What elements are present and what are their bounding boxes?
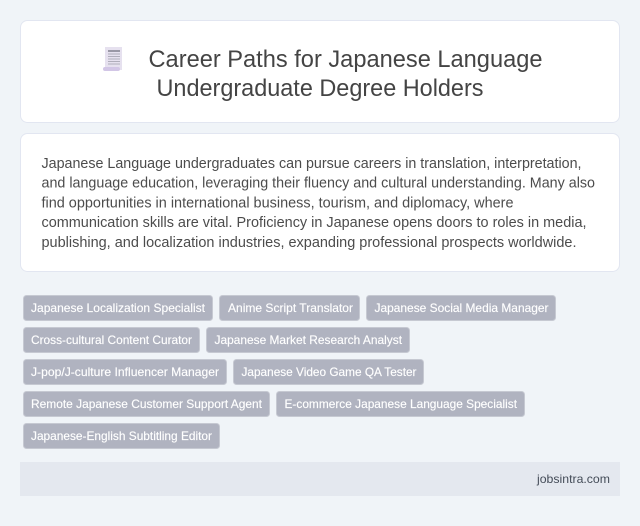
tag: E-commerce Japanese Language Specialist: E-commerce Japanese Language Specialist xyxy=(284,397,518,411)
tag list xyxy=(24,296,556,448)
title: Career Paths for Japanese Language xyxy=(148,46,542,73)
tag: Japanese Localization Specialist: Japanese Localization Specialist xyxy=(31,301,206,315)
tag: Cross-cultural Content Curator xyxy=(24,328,200,352)
text block: summary xyxy=(42,156,595,251)
tag: Japanese Social Media Manager xyxy=(366,296,556,320)
text block: summary: Japanese Language undergraduates can pursue careers in translation, interpretation, xyxy=(42,156,582,172)
title: Undergraduate Degree Holders xyxy=(156,75,484,102)
tag: Japanese-English Subtitling Editor: Japanese-English Subtitling Editor xyxy=(31,429,212,443)
panel: summary xyxy=(20,134,620,272)
tag: Remote Japanese Customer Support Agent xyxy=(24,392,270,416)
tag: J-pop/J-culture Influencer Manager: J-pop/J-culture Influencer Manager xyxy=(31,365,219,379)
footer: jobsintra.com xyxy=(536,472,610,486)
title xyxy=(148,46,542,102)
text block: summary: publishing, and localization industries, expanding professional prospects worldwide. xyxy=(42,235,576,251)
footer xyxy=(20,462,620,496)
tag: Anime Script Translator xyxy=(220,296,360,320)
panel: header xyxy=(20,20,620,122)
tag: Japanese Video Game QA Tester xyxy=(234,360,424,384)
tag: Japanese Localization Specialist xyxy=(24,296,212,320)
tag: Japanese Market Research Analyst: Japanese Market Research Analyst xyxy=(214,333,403,347)
tag: Remote Japanese Customer Support Agent: Remote Japanese Customer Support Agent xyxy=(31,397,263,411)
tag: Anime Script Translator: Anime Script Translator xyxy=(228,301,353,315)
text block: summary: find opportunities in international business, tourism, and diplomacy, where xyxy=(42,196,514,212)
tag: Japanese Video Game QA Tester: Japanese Video Game QA Tester xyxy=(242,365,416,379)
text block: summary: and language education, leveraging their fluency and cultural understanding. Many also xyxy=(42,176,595,192)
text block: summary: communication skills are vital. Proficiency in Japanese opens doors to roles in media, xyxy=(42,215,586,231)
tag: Japanese Market Research Analyst xyxy=(206,328,410,352)
tag: Japanese Social Media Manager: Japanese Social Media Manager xyxy=(374,301,548,315)
tag: Cross-cultural Content Curator: Cross-cultural Content Curator xyxy=(31,333,192,347)
tag: Japanese-English Subtitling Editor xyxy=(24,424,220,448)
icon: document scroll xyxy=(103,47,122,71)
tag: J-pop/J-culture Influencer Manager xyxy=(24,360,226,384)
tag: E-commerce Japanese Language Specialist xyxy=(276,392,524,416)
